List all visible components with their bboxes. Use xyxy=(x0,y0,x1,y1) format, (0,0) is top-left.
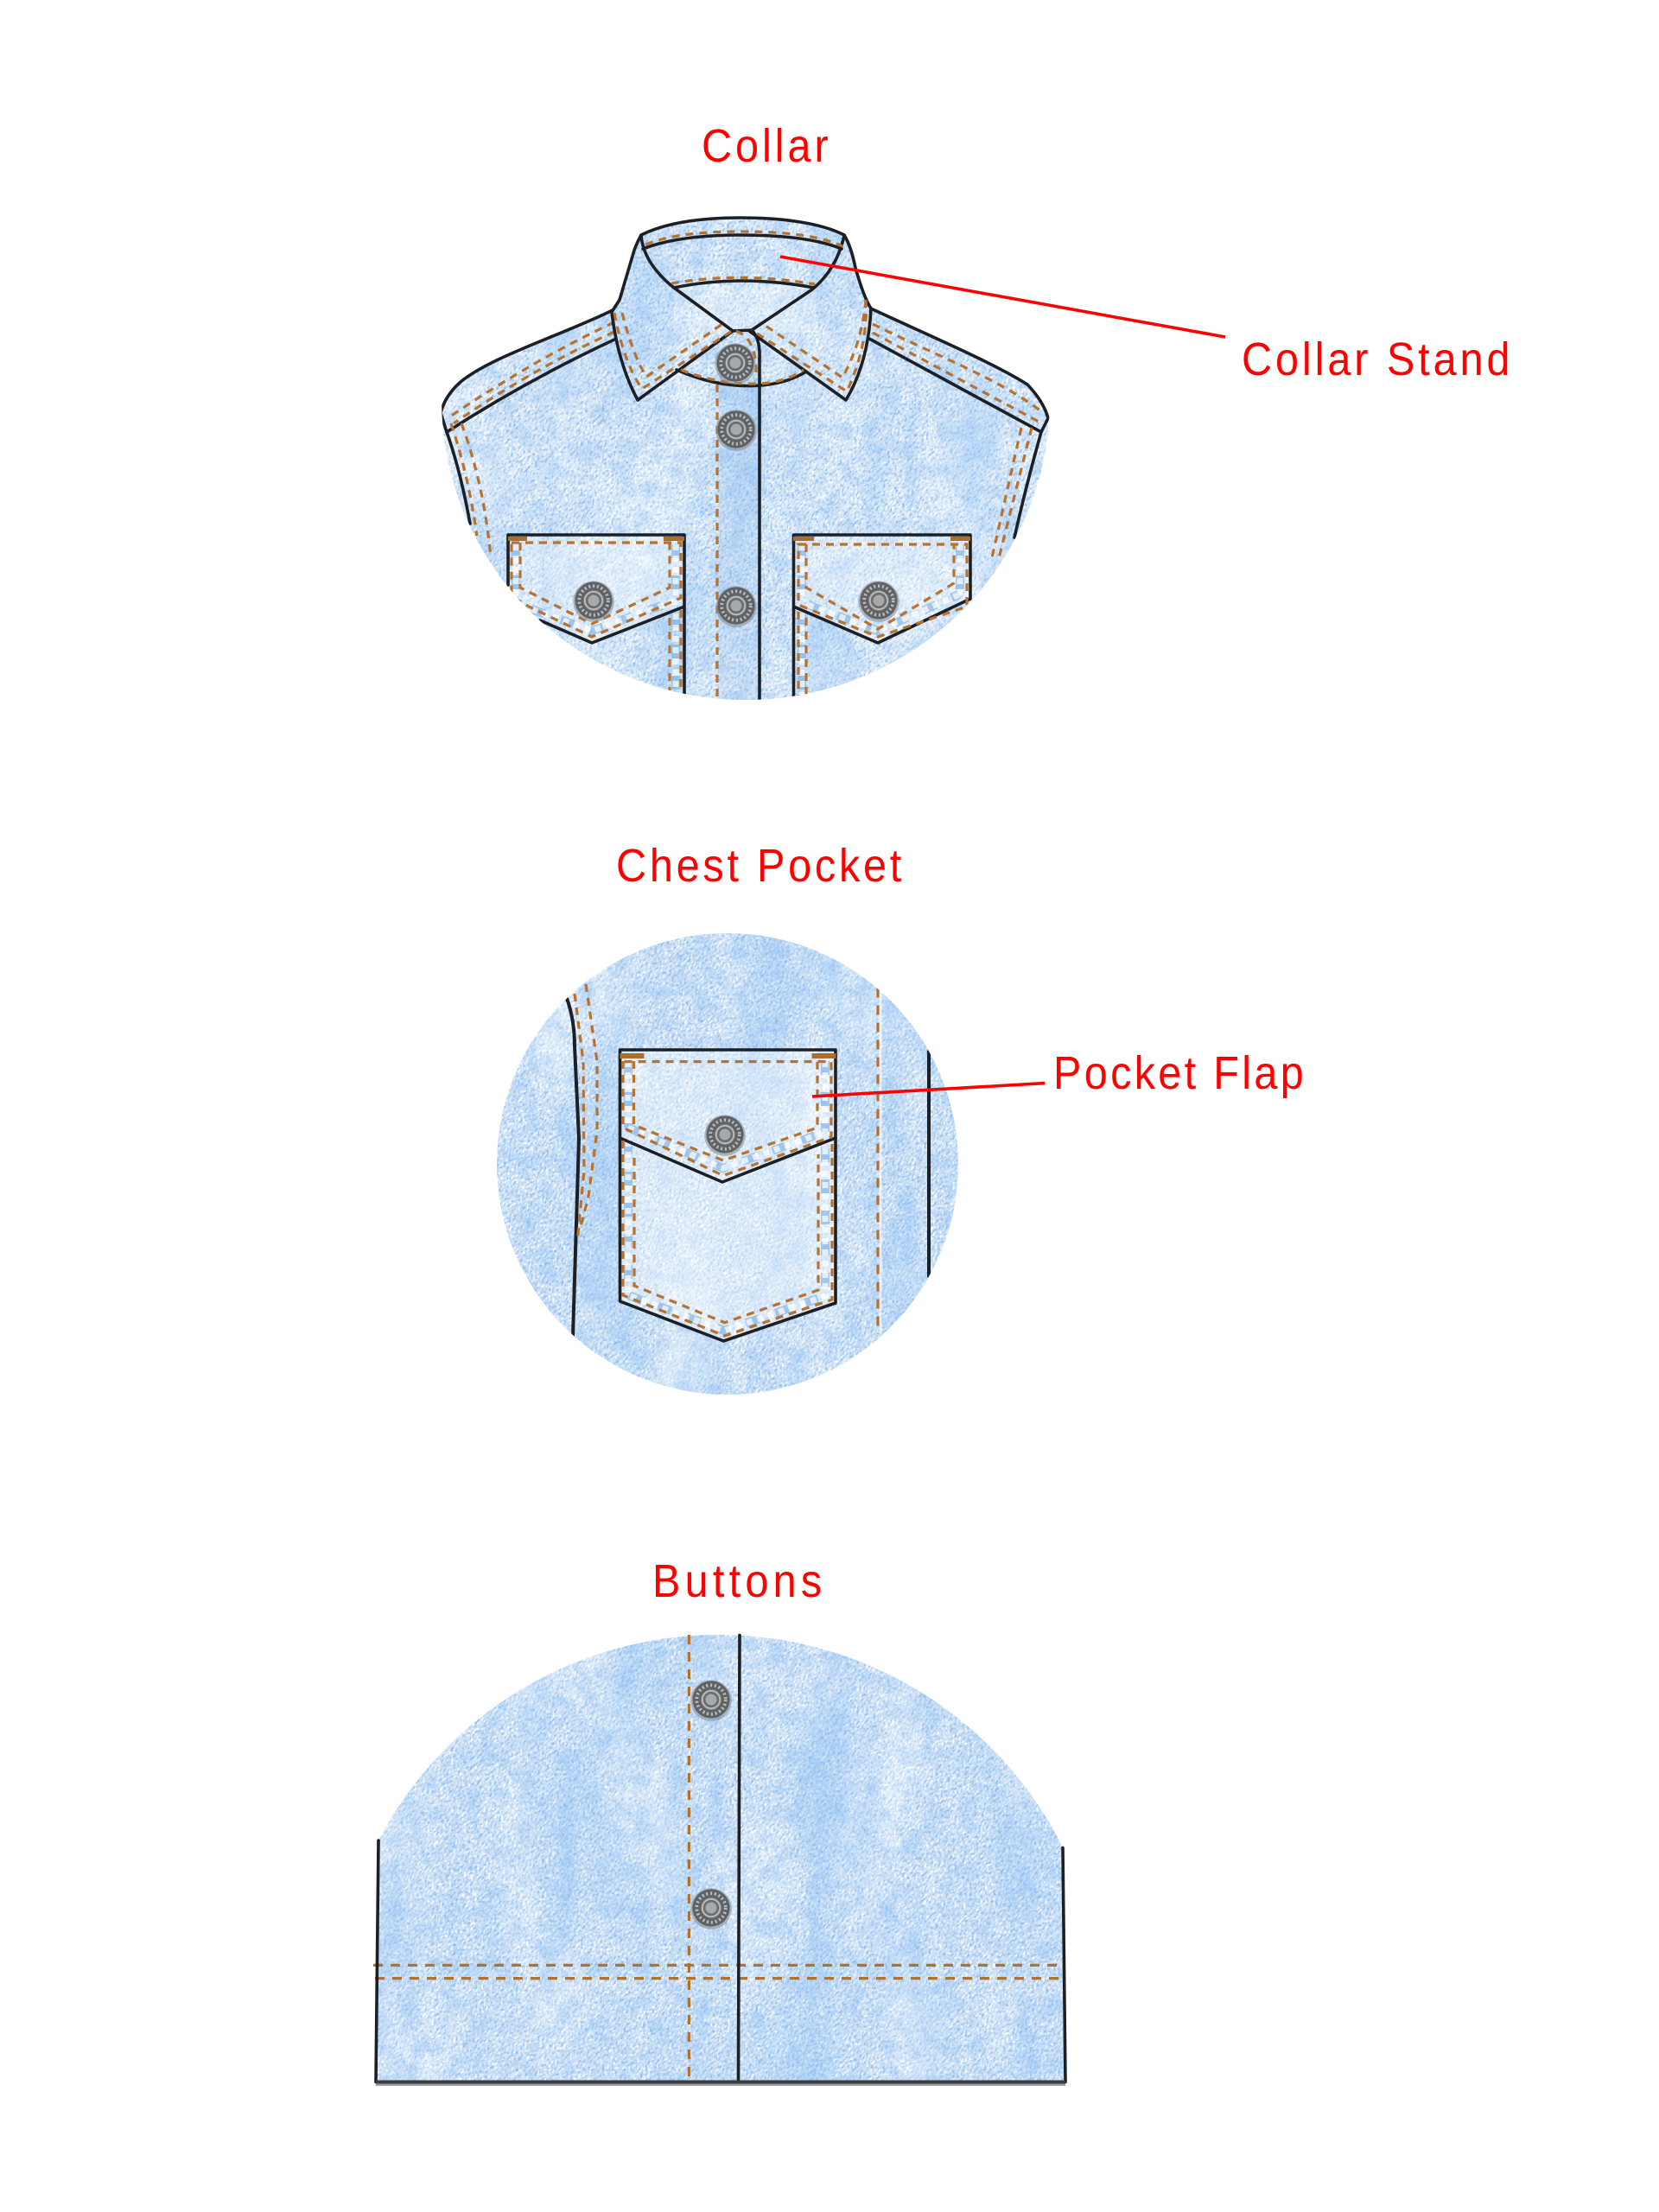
collar stitching xyxy=(614,232,866,391)
title: Buttons: Buttons xyxy=(652,1554,822,1607)
denim fill: shirt yoke and collar xyxy=(436,207,1058,704)
icon: placket buttons xyxy=(690,1680,732,1929)
shoulder seams xyxy=(441,309,1048,432)
horizontal hem stitching xyxy=(373,1965,1061,1979)
placket xyxy=(717,359,760,700)
right chest pocket xyxy=(793,535,970,700)
leader line: Pocket Flap xyxy=(812,1084,1045,1096)
left seam xyxy=(567,984,597,1336)
denim fill: hem panel xyxy=(372,1629,1071,2087)
placket edge xyxy=(738,1636,740,2082)
right seam xyxy=(878,988,929,1334)
panel: collar illustration xyxy=(436,207,1058,704)
icon: collar buttons xyxy=(573,343,899,627)
left chest pocket xyxy=(508,535,684,700)
panel: buttons illustration xyxy=(372,1629,1071,2087)
collar outline xyxy=(612,218,871,400)
armhole seams xyxy=(447,423,1041,562)
pocket body xyxy=(620,1050,836,1341)
outline xyxy=(376,1840,1065,2084)
vertical placket stitching xyxy=(688,1635,690,2082)
title: Collar: Collar xyxy=(702,119,829,172)
icon: pocket button xyxy=(704,1115,746,1156)
label: Pocket Flap: Pocket Flap xyxy=(1053,1046,1304,1099)
leader line: Collar Stand xyxy=(780,257,1225,337)
label: Collar Stand: Collar Stand xyxy=(1242,333,1510,385)
title: Chest Pocket: Chest Pocket xyxy=(616,839,901,892)
denim fill: circle xyxy=(493,929,963,1400)
panel: chest pocket illustration xyxy=(493,929,963,1400)
